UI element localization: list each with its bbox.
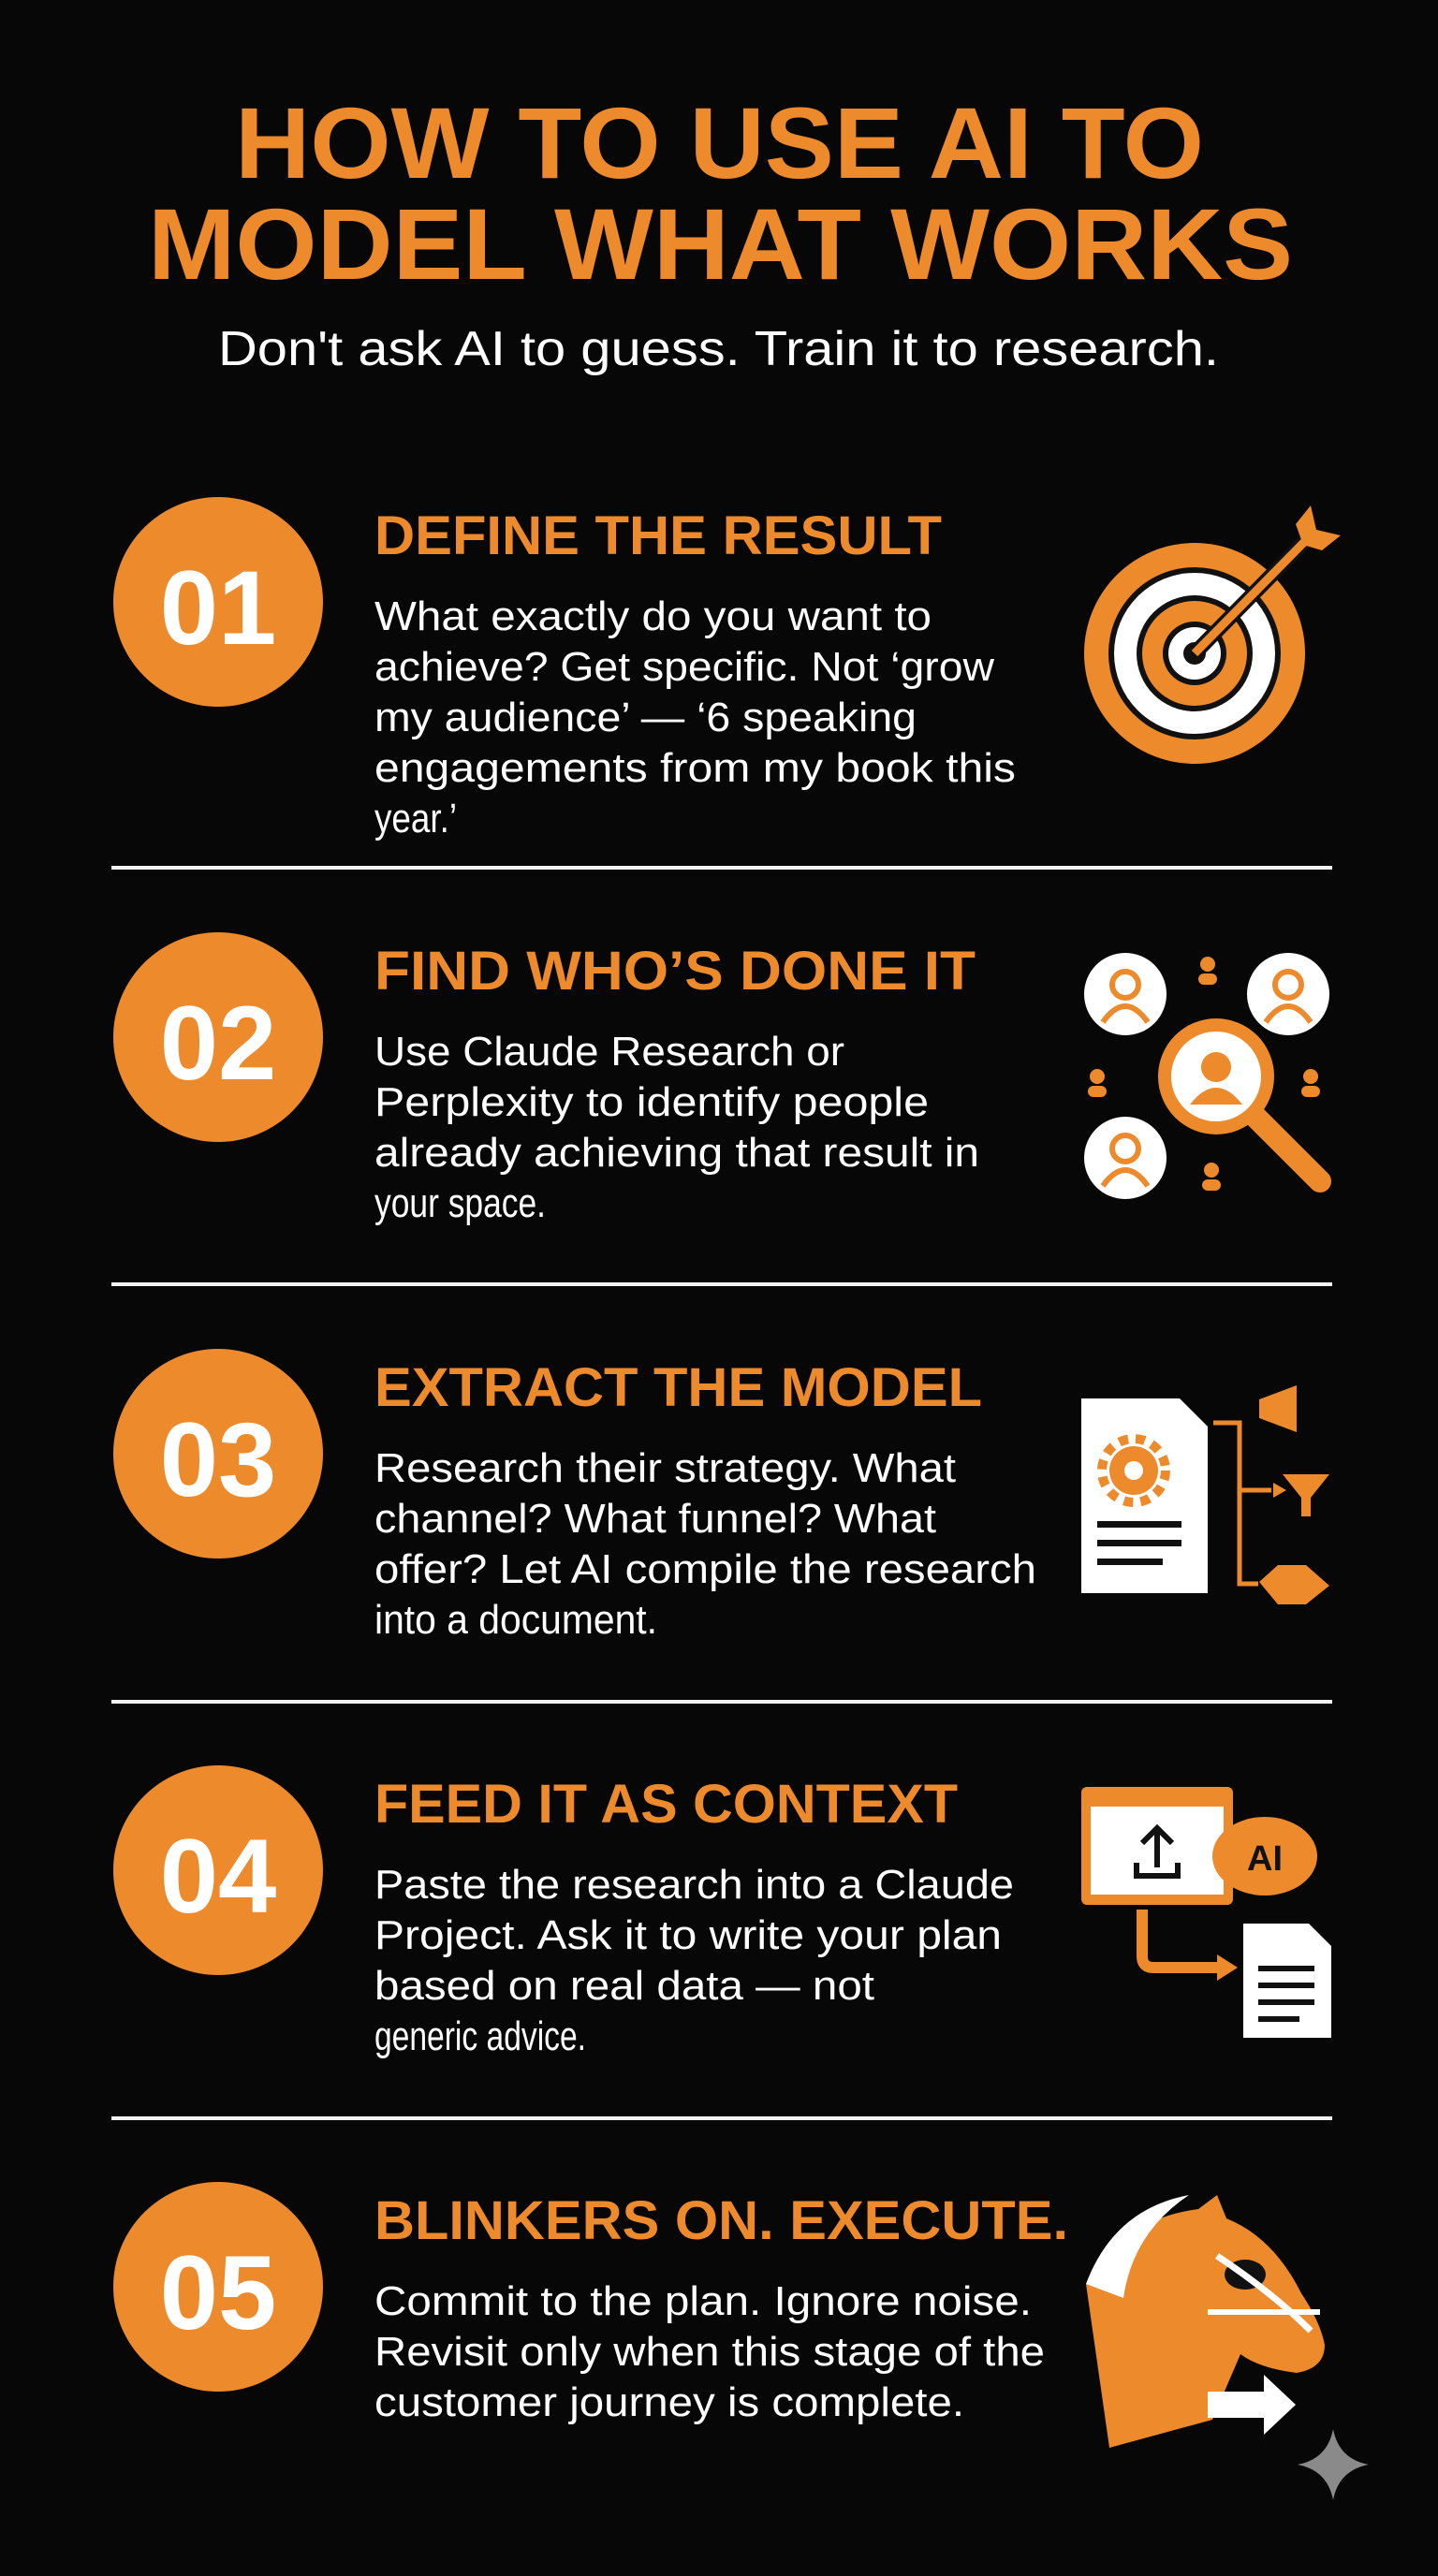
number badge 03 xyxy=(113,1349,323,1559)
number badge 04 xyxy=(113,1765,323,1975)
icon: target with arrow xyxy=(1084,505,1341,764)
body text 1: achieve? Get specific. Not ‘grow xyxy=(374,644,994,690)
title: HOW TO USE AI TO xyxy=(235,86,1204,199)
body text 4: Paste the research into a Claude xyxy=(374,1862,1014,1908)
body text 3: into a document. xyxy=(374,1597,657,1643)
heading: feed it as context: FEED IT AS CONTEXT xyxy=(374,1774,958,1835)
body text 2: Perplexity to identify people xyxy=(374,1079,929,1125)
number badge 02 xyxy=(113,932,323,1142)
body text 4: Project. Ask it to write your plan xyxy=(374,1912,1002,1958)
body text 5: Revisit only when this stage of the xyxy=(374,2329,1045,2375)
body text 3: Research their strategy. What xyxy=(374,1445,956,1491)
heading: extract the model: EXTRACT THE MODEL xyxy=(374,1357,982,1418)
number badge 01: 01 xyxy=(160,549,276,666)
icon: monitor upload, AI brain, document xyxy=(1081,1787,1331,2038)
body text 1: engagements from my book this xyxy=(374,745,1016,791)
heading: find who's done it: FIND WHO’S DONE IT xyxy=(374,941,976,1002)
body text 1: year.’ xyxy=(374,796,457,842)
title xyxy=(148,86,1293,300)
number badge 03: 03 xyxy=(160,1401,276,1518)
body text 1: my audience’ — ‘6 speaking xyxy=(374,695,917,740)
icon: people search xyxy=(1084,953,1329,1199)
number badge 05: 05 xyxy=(160,2234,276,2351)
icon: monitor upload, AI brain, document: AI xyxy=(1247,1839,1283,1879)
heading: blinkers on execute: BLINKERS ON. EXECUTE. xyxy=(374,2190,1068,2251)
body text 4: generic advice. xyxy=(374,2013,586,2059)
icon: horse head with blinkers and arrow xyxy=(1086,2195,1325,2448)
body text 2: Use Claude Research or xyxy=(374,1029,844,1075)
icon: document with gear and outputs xyxy=(1081,1385,1329,1604)
body text 3: channel? What funnel? What xyxy=(374,1496,936,1542)
body text 5: customer journey is complete. xyxy=(374,2379,964,2425)
step 5 xyxy=(113,2182,1325,2448)
body text 1: What exactly do you want to xyxy=(374,593,932,639)
subtitle: Don't ask AI to guess. Train it to research. xyxy=(218,322,1219,376)
body text 5 xyxy=(374,2278,1045,2425)
body text 5: Commit to the plan. Ignore noise. xyxy=(374,2278,1032,2324)
body text 1 xyxy=(374,593,1016,842)
step 4 xyxy=(113,1765,1331,2059)
body text 2: your space. xyxy=(374,1180,546,1226)
number badge 04: 04 xyxy=(160,1818,276,1935)
body text 2: already achieving that result in xyxy=(374,1130,979,1176)
icon: sparkle xyxy=(1298,2429,1369,2500)
body text 4: based on real data — not xyxy=(374,1963,874,2009)
number badge 05 xyxy=(113,2182,323,2392)
body text 3 xyxy=(374,1445,1036,1643)
step 3 xyxy=(113,1349,1329,1643)
step 2 xyxy=(113,932,1329,1226)
title: MODEL WHAT WORKS xyxy=(148,187,1293,300)
number badge 01 xyxy=(113,497,323,707)
body text 2 xyxy=(374,1029,979,1226)
body text 4 xyxy=(374,1862,1014,2059)
step 1 xyxy=(113,497,1341,842)
body text 3: offer? Let AI compile the research xyxy=(374,1546,1036,1592)
heading: define the result: DEFINE THE RESULT xyxy=(374,505,942,566)
number badge 02: 02 xyxy=(160,985,276,1102)
